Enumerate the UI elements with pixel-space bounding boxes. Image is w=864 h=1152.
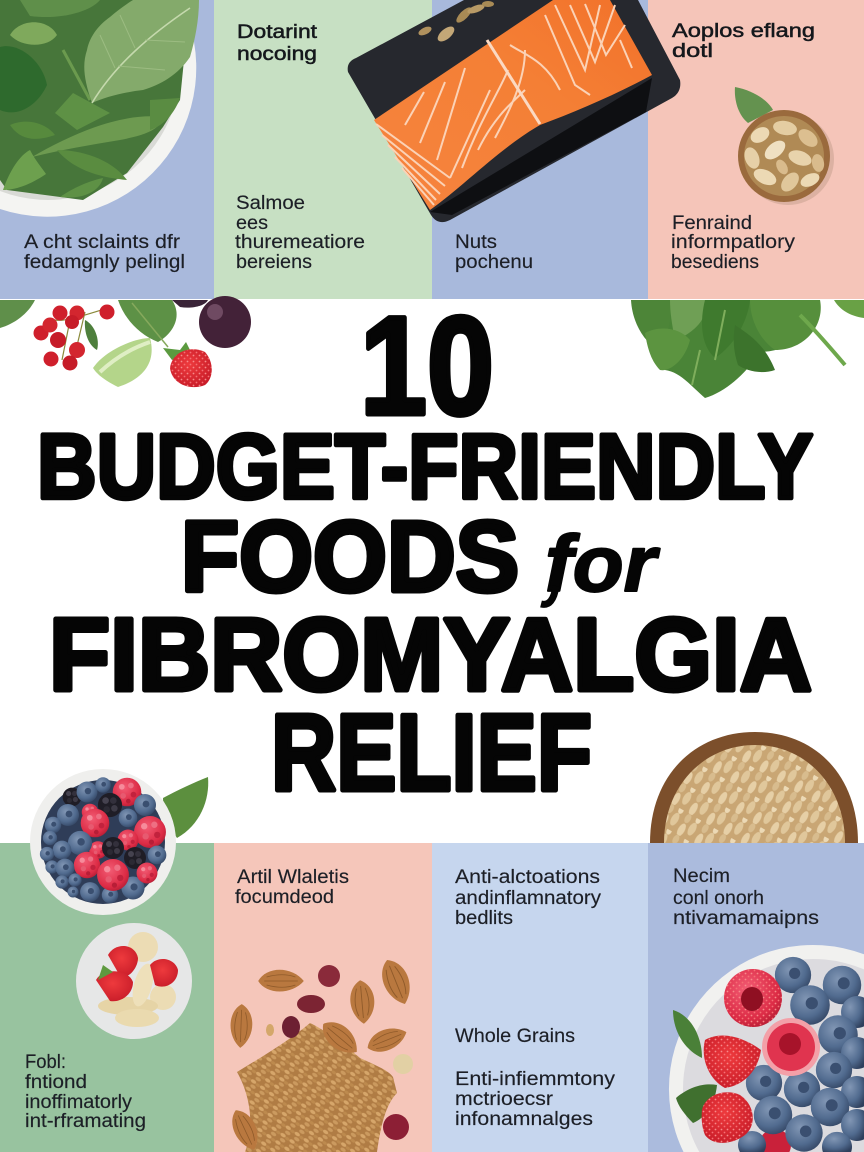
icon: bowl of nuts (735, 87, 834, 205)
text: caption (455, 1069, 616, 1130)
text: heading: Artil Wlaletis (237, 867, 349, 888)
icon: spinach top right (631, 300, 864, 398)
icon: bowl of mixed berries (30, 769, 208, 915)
text: panel caption (24, 232, 185, 273)
text: caption: Fobl: (25, 1052, 66, 1073)
text: salmon caption: Salmoe (236, 193, 305, 214)
icon: plate with strawberries and banana (76, 923, 192, 1039)
icon: bowl of oats (650, 732, 858, 843)
icon: nuts and grains (226, 955, 417, 1152)
text: heading: focumdeod (235, 887, 334, 908)
text: panel caption: A cht sclaints dfr (24, 232, 181, 253)
text: heading: Dotarint (237, 22, 318, 43)
text: heading (673, 866, 819, 929)
title: for (545, 519, 660, 608)
text: heading: dotl (672, 41, 713, 62)
text: heading: Necim (673, 866, 730, 887)
text: heading: conl onorh (673, 888, 764, 909)
text: salmon caption: ees (236, 213, 268, 234)
text: heading: Aoplos eflang (672, 21, 815, 42)
text: heading (235, 867, 349, 908)
title: 10 (360, 287, 494, 444)
text: caption: informpatlory (671, 232, 796, 253)
text: heading: andinflamnatory (455, 888, 602, 909)
text: heading: Anti-alctoations (455, 867, 600, 888)
text: caption: int-rframating (25, 1111, 146, 1132)
panel: top right pink (648, 0, 864, 299)
panel: bottom pink (214, 843, 432, 1152)
text: nuts caption: Nuts (455, 232, 497, 253)
text: caption (671, 213, 796, 273)
panel: bottom right blue (648, 843, 864, 1152)
text: caption: mctrioecsr (455, 1089, 554, 1110)
text: nuts caption (455, 232, 533, 273)
text: caption: Enti-infiemmtony (455, 1069, 616, 1090)
title: RELIEF (271, 692, 592, 814)
panel: top middle green (214, 0, 432, 299)
text: heading: ntivamamaipns (673, 908, 819, 929)
text: heading (672, 21, 815, 62)
text: heading (237, 22, 318, 65)
text: caption: Fenraind (672, 213, 752, 234)
title (37, 287, 813, 814)
text: whole grains: Whole Grains (455, 1026, 575, 1047)
text: heading: nocoing (237, 44, 317, 65)
text: salmon caption: thuremeatiore (235, 232, 365, 253)
icon: salmon on slate board (348, 0, 680, 222)
icon: berries top left (0, 296, 251, 387)
text: caption: infonamnalges (455, 1109, 593, 1130)
title: FOODS (181, 501, 519, 613)
panel: top left leafy greens (0, 0, 214, 299)
title: FIBROMYALGIA (49, 597, 812, 712)
panel: bottom left green (0, 843, 214, 1152)
text: caption: fntiond (25, 1072, 87, 1093)
icon: bowl of berries (669, 945, 864, 1152)
text: caption: besediens (671, 252, 759, 273)
panel: bottom light blue (432, 843, 648, 1152)
icon: bowl of spinach (0, 0, 199, 217)
text: heading (455, 867, 602, 929)
text: panel caption: fedamgnly pelingl (24, 252, 185, 273)
text: salmon caption: bereiens (236, 252, 312, 273)
panel: top blue (432, 0, 648, 299)
text: heading: bedlits (455, 908, 513, 929)
text: nuts caption: pochenu (455, 252, 533, 273)
text: caption: inoffimatorly (25, 1092, 133, 1113)
text: caption (25, 1052, 146, 1132)
text: salmon caption (235, 193, 365, 273)
